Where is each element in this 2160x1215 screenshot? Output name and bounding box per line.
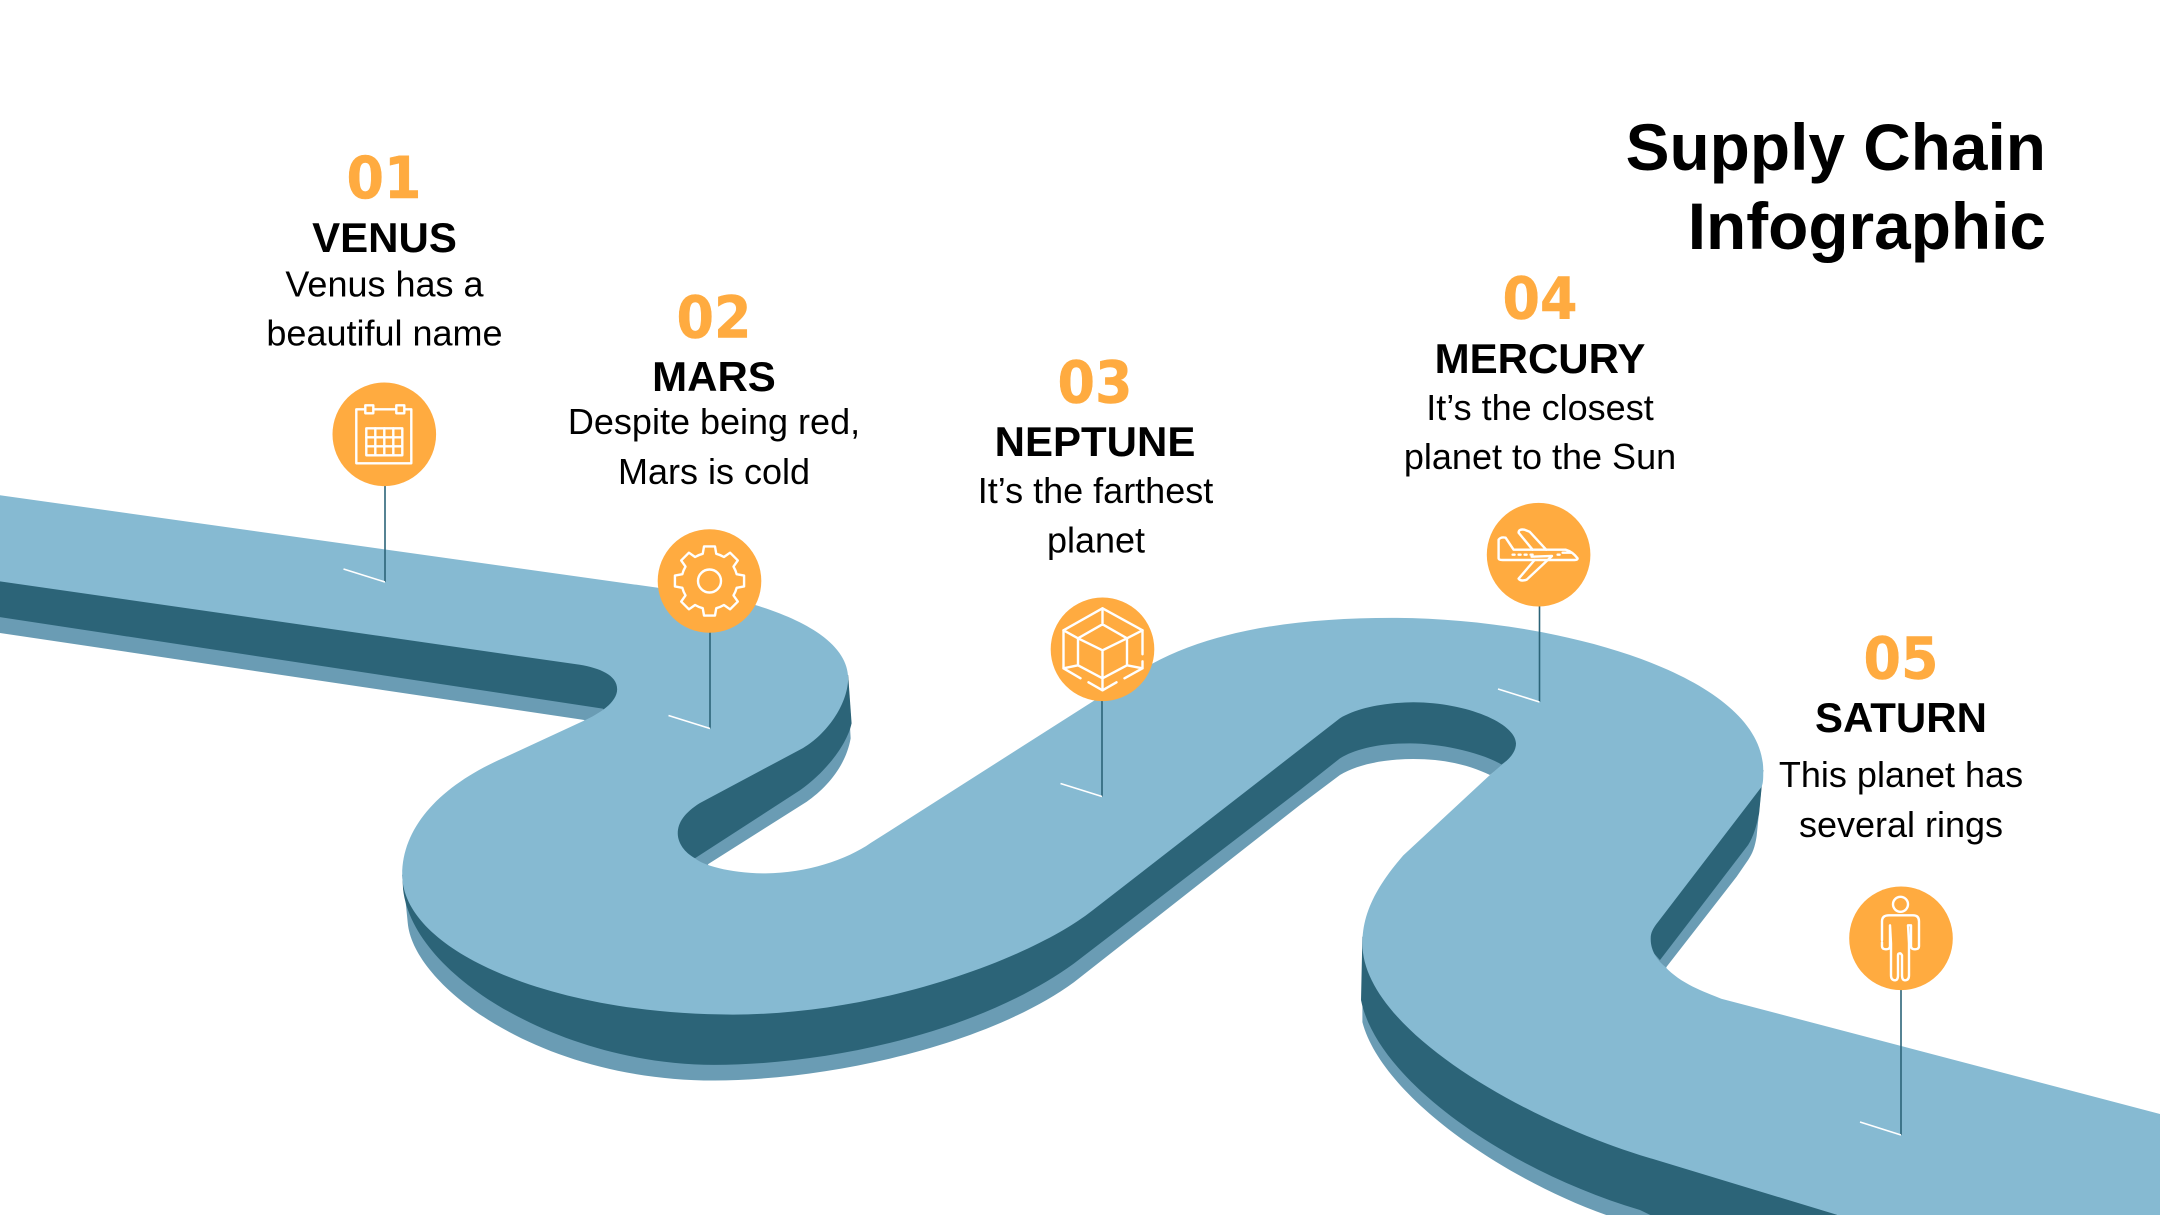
step 02 text: MARS (652, 353, 776, 400)
step 04 text: MERCURY (1435, 335, 1645, 382)
step 05 text: several rings (1799, 804, 2003, 845)
pin 02: gear (658, 529, 761, 728)
step 01 text: beautiful name (266, 312, 503, 354)
title (1626, 110, 2046, 263)
step 03 text: planet (1047, 520, 1145, 560)
step 01 text: 01 (346, 144, 422, 212)
step 05 text: SATURN (1815, 694, 1987, 741)
pin 03: box (1051, 598, 1154, 796)
step 04 text (1404, 264, 1676, 477)
step 03 text: NEPTUNE (995, 418, 1195, 465)
step 01 text (266, 144, 503, 354)
winding road (0, 495, 2160, 1215)
pin 04: airplane (1487, 503, 1590, 702)
step 03 text: 03 (1058, 348, 1132, 416)
step 03 text (978, 348, 1213, 560)
step 05 text: This planet has (1779, 754, 2023, 795)
title: Infographic (1688, 189, 2046, 263)
pin 05: person (1849, 886, 1953, 1135)
step 04 text: planet to the Sun (1404, 436, 1676, 477)
step 02 text: Mars is cold (618, 451, 810, 492)
step 04 text: 04 (1502, 264, 1578, 332)
step 03 text: It’s the farthest (978, 470, 1213, 511)
step 01 text: Venus has a (285, 264, 485, 304)
pin 01: calendar (332, 382, 436, 582)
step 04 text: It’s the closest (1426, 387, 1654, 428)
step 02 text: Despite being red, (568, 401, 860, 442)
step 05 text (1779, 624, 2023, 845)
step 05 text: 05 (1864, 624, 1938, 692)
step 02 text: 02 (676, 284, 752, 352)
step 02 text (568, 284, 860, 492)
step 01 text: VENUS (312, 214, 457, 261)
title: Supply Chain (1626, 110, 2046, 184)
